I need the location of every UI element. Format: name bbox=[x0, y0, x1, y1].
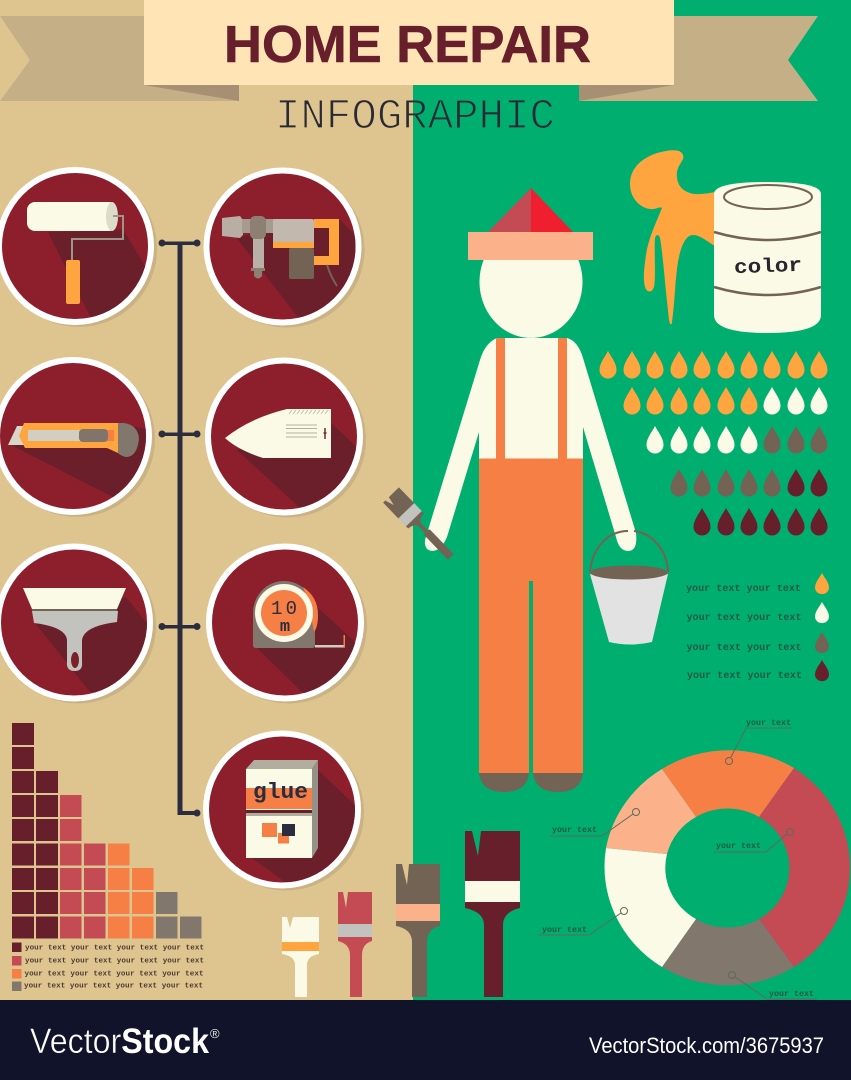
drops legend: your text your text bbox=[686, 643, 802, 654]
icon: paint roller bbox=[0, 167, 170, 330]
brush: brown bbox=[396, 864, 440, 997]
donut labels: your text bbox=[552, 826, 597, 835]
background: green panel bbox=[413, 0, 851, 1000]
connector lines bbox=[158, 240, 200, 816]
bar chart legend: your text your text your text your text bbox=[25, 958, 204, 966]
held paint brush bbox=[383, 487, 459, 565]
bar chart legend: your text your text your text your text bbox=[24, 970, 204, 978]
icon: tape measure bbox=[206, 544, 367, 704]
ribbon: left bbox=[0, 16, 239, 101]
title: HOME REPAIR bbox=[224, 16, 591, 74]
paint drops grid bbox=[600, 351, 828, 536]
bar chart legend: your text your text your text your text bbox=[24, 982, 203, 990]
boots bbox=[479, 773, 583, 792]
donut labels: your text bbox=[542, 926, 587, 935]
bucket bbox=[590, 531, 668, 644]
paint can: color bbox=[734, 255, 802, 280]
watermark: url: VectorStock.com/3675937 bbox=[589, 1033, 824, 1058]
watermark: logo: VectorStock bbox=[30, 1022, 209, 1061]
icon: glue box bbox=[203, 730, 365, 890]
donut callouts bbox=[538, 728, 817, 999]
donut chart bbox=[604, 750, 850, 985]
hat bbox=[468, 188, 593, 260]
brush: red bbox=[338, 892, 372, 997]
drops legend: your text your text bbox=[687, 671, 802, 682]
head bbox=[480, 260, 582, 338]
icon: scraper blade bbox=[205, 358, 366, 518]
donut labels bbox=[542, 719, 814, 999]
icon: tape measure: 10 bbox=[271, 598, 297, 620]
donut labels: your text bbox=[716, 842, 761, 851]
drops legend bbox=[686, 573, 829, 682]
icon: utility knife bbox=[0, 357, 160, 517]
title banner bbox=[144, 0, 674, 85]
icon: hammer drill bbox=[204, 168, 370, 330]
drops legend: your text your text bbox=[686, 584, 801, 595]
bar chart legend bbox=[12, 942, 204, 991]
paint splash bbox=[630, 150, 715, 324]
torso and arms bbox=[425, 338, 636, 551]
bar chart legend: your text your text your text your text bbox=[25, 944, 204, 952]
paint can bbox=[714, 182, 821, 333]
trousers bbox=[479, 458, 583, 773]
worker figure bbox=[425, 188, 636, 792]
watermark: registered mark: ® bbox=[210, 1026, 220, 1041]
background: tan panel bbox=[0, 0, 413, 1000]
donut labels: your text bbox=[769, 990, 814, 999]
brush: maroon large bbox=[465, 831, 520, 997]
icon: glue box: glue bbox=[253, 780, 308, 805]
donut labels: your text bbox=[746, 719, 791, 728]
ribbon: right bbox=[579, 16, 818, 101]
icon: tape measure: m bbox=[280, 618, 290, 637]
footer bar bbox=[0, 1000, 851, 1080]
icon: putty knife bbox=[0, 544, 160, 704]
subtitle: INFOGRAPHIC bbox=[275, 92, 555, 141]
suspenders bbox=[496, 338, 567, 459]
drops legend: your text your text bbox=[686, 613, 802, 624]
bar chart bbox=[12, 723, 202, 938]
brush: cream small bbox=[282, 917, 319, 997]
